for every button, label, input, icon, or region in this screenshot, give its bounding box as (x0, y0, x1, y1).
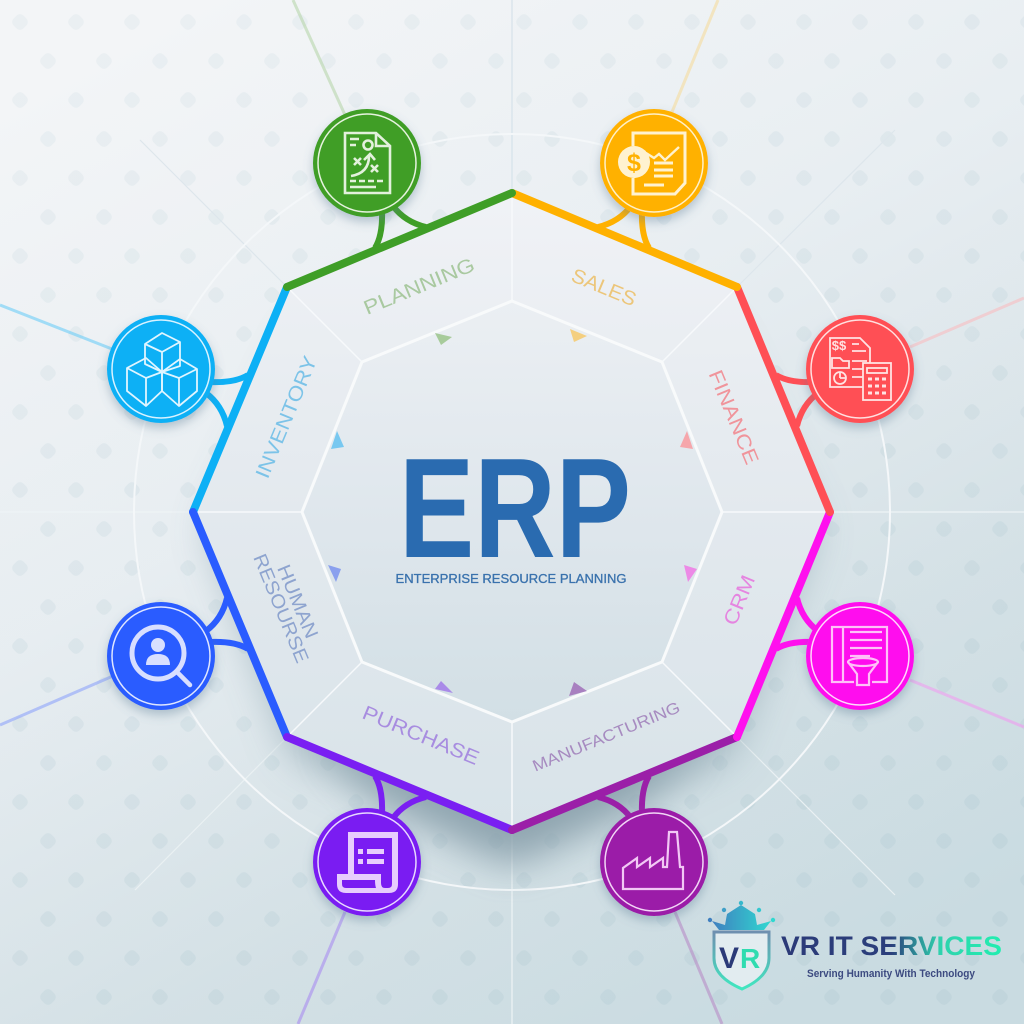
icon: purchase receipt (313, 808, 421, 916)
label: human resourse: RESOURSE (248, 551, 312, 666)
octagon panel (193, 193, 830, 830)
icon: factory (600, 808, 708, 916)
label: crm: CRM (720, 572, 760, 629)
octagon coloured edges (193, 193, 830, 830)
label: sales: SALES (568, 265, 639, 311)
logo monogram: V (719, 942, 739, 975)
label: purchase: PURCHASE (359, 702, 482, 770)
label: finance: FINANCE (704, 367, 762, 468)
logo crown (708, 901, 775, 930)
logo wordmark: VR IT SERVICES (781, 931, 1002, 961)
icon: finance documents and calculator (806, 315, 914, 423)
icon: finance documents and calculator: $$ (832, 338, 847, 353)
label: human resourse: HUMAN (272, 562, 321, 642)
icon: human resource search (107, 602, 215, 710)
logo shield (714, 932, 769, 989)
label: inventory: INVENTORY (252, 353, 322, 482)
logo monogram: R (740, 943, 760, 974)
label: planning: PLANNING (361, 254, 478, 320)
title: ERP: ERP (399, 429, 631, 588)
sector pointer triangles (328, 329, 697, 696)
icon: planning document (313, 109, 421, 217)
icon: crm funnel book (806, 602, 914, 710)
icon: sales report: $ (627, 149, 641, 177)
icon: inventory boxes (107, 315, 215, 423)
central octagon (302, 301, 722, 722)
logo monogram (719, 942, 760, 975)
logo tagline: Serving Humanity With Technology (807, 968, 976, 980)
label: human resourse (248, 544, 329, 666)
sector dividers (193, 193, 830, 830)
icon: sales report (600, 109, 708, 217)
label: manufacturing: MANUFACTURING (530, 699, 683, 775)
subtitle: ENTERPRISE RESOURCE PLANNING (396, 572, 626, 586)
octagon shadow (209, 300, 815, 865)
outer ring (134, 134, 890, 890)
logo: VR IT Services (708, 901, 1002, 989)
connector legs (206, 206, 818, 818)
